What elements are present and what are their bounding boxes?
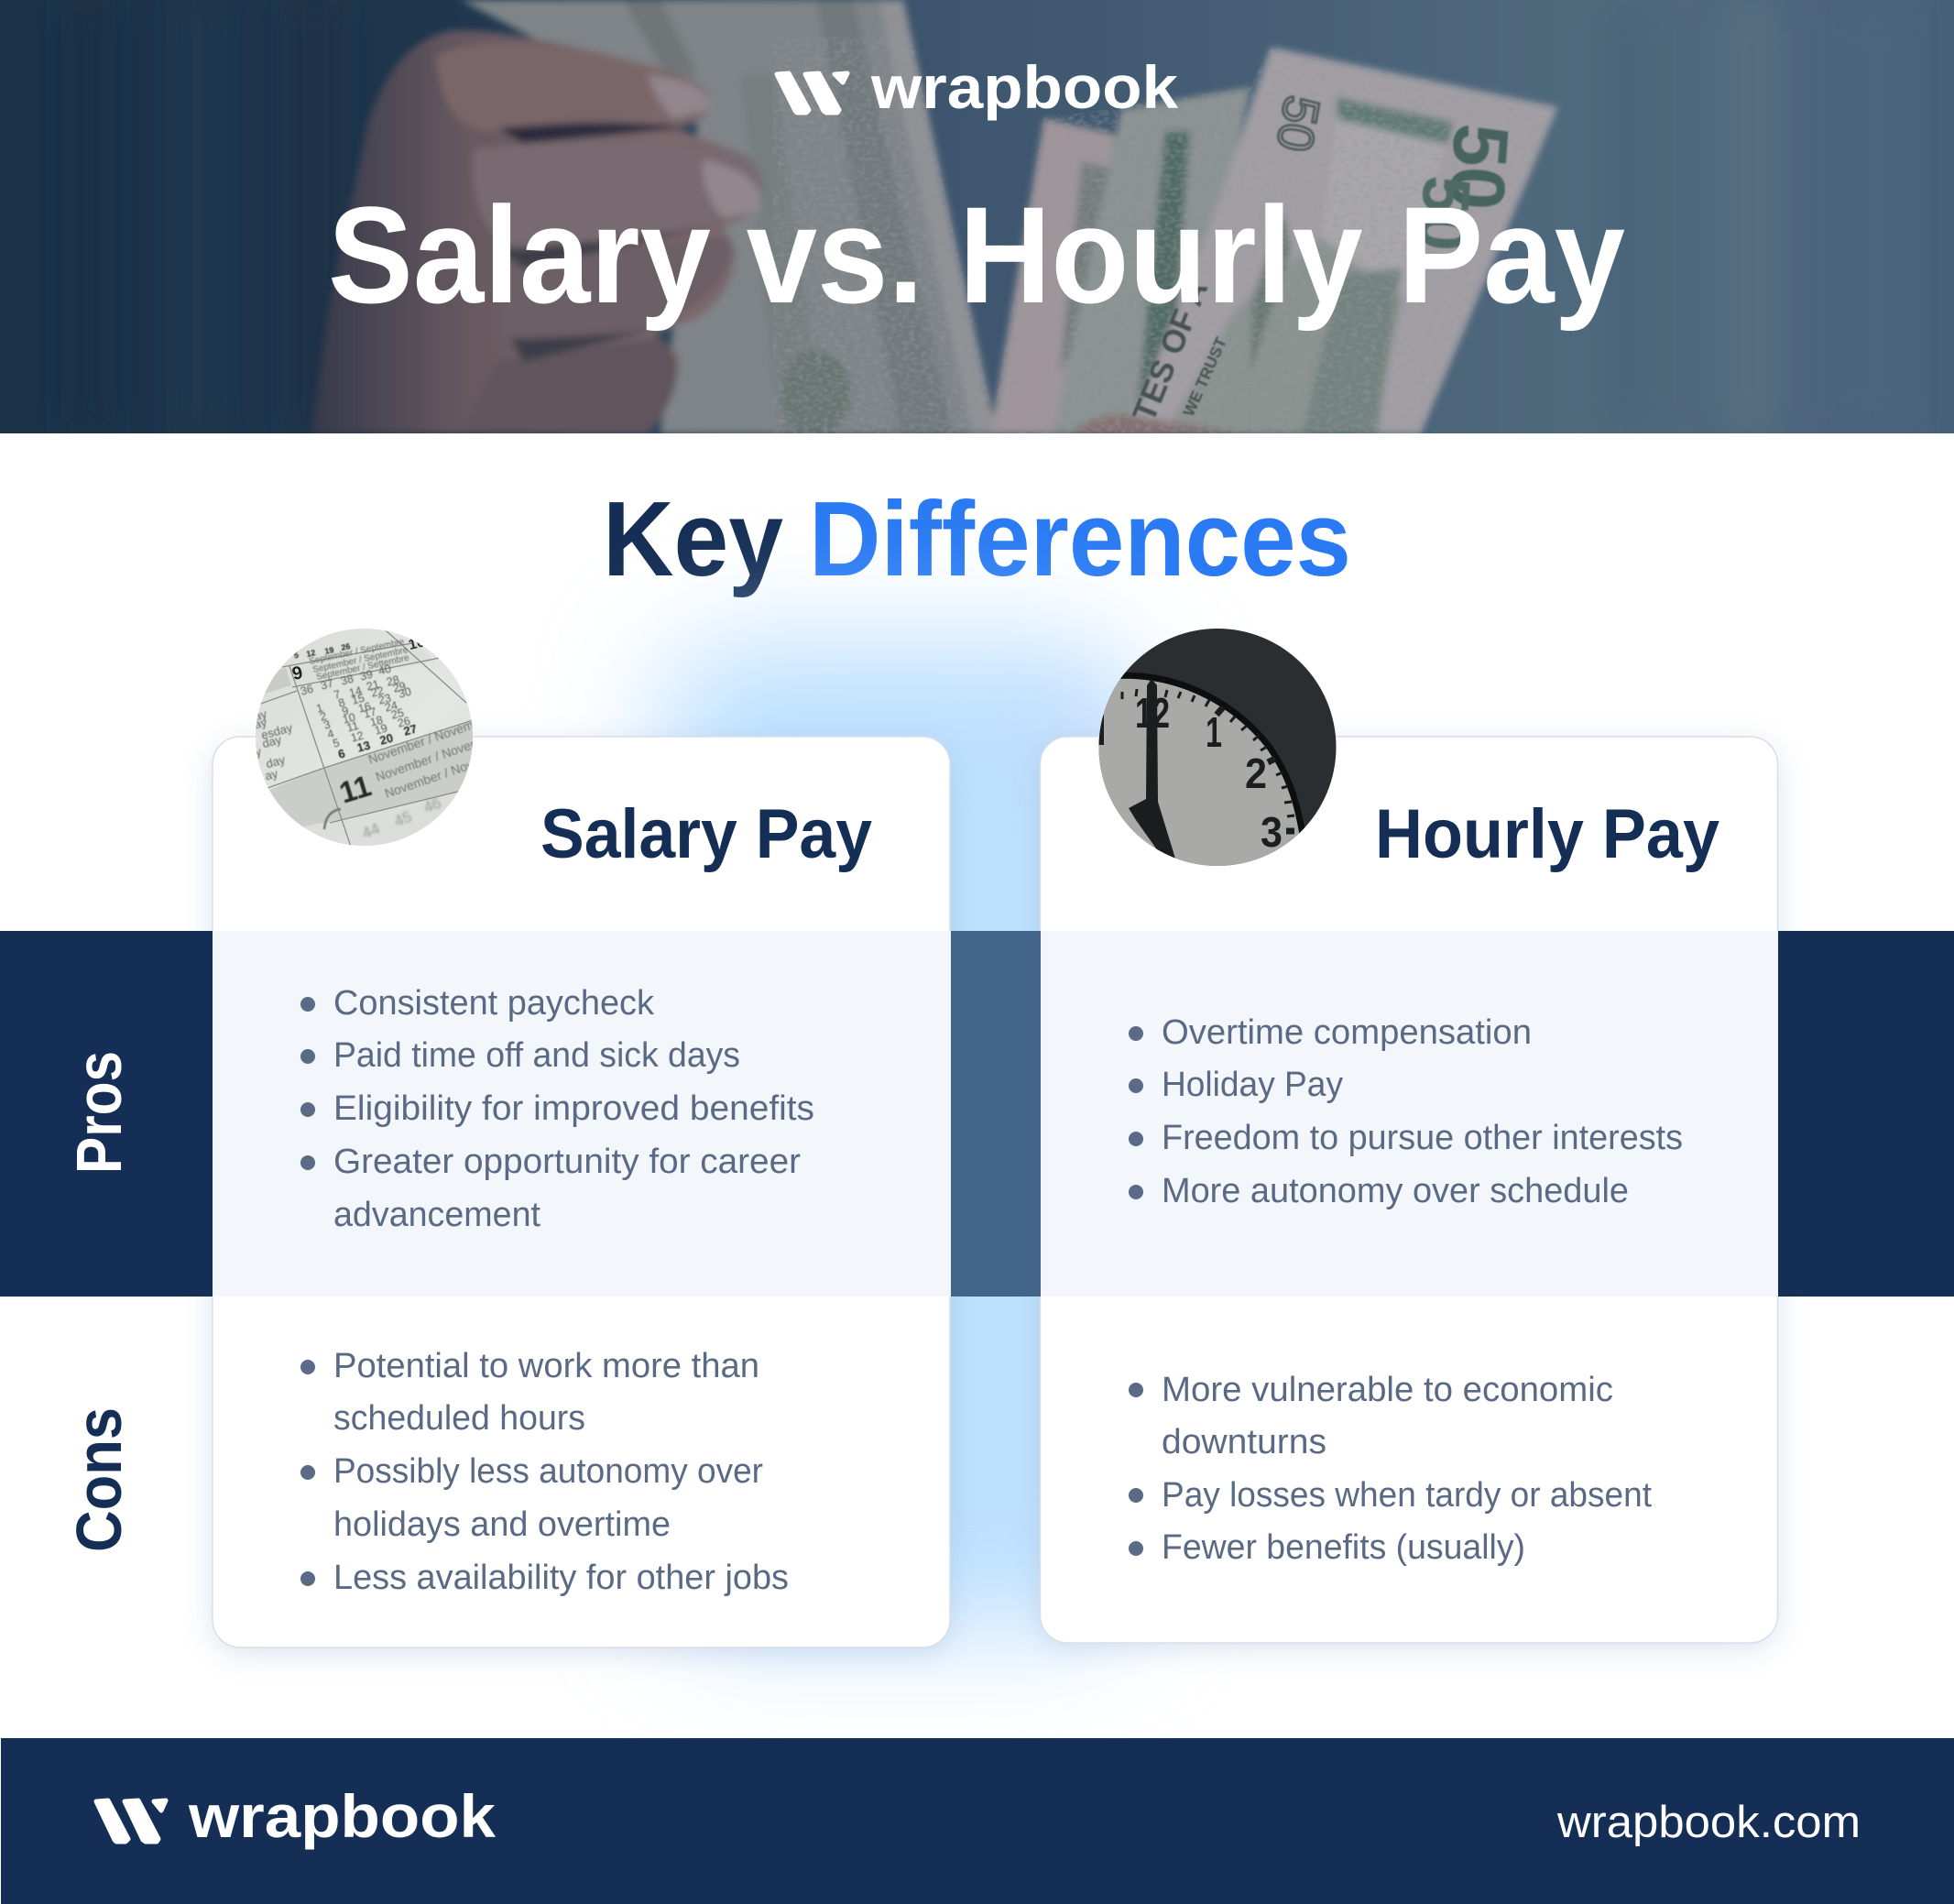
photo: calendar: 5 xyxy=(293,651,300,660)
list: Hourly cons: downturns xyxy=(1162,1423,1326,1461)
photo: calendar: 28 xyxy=(385,673,401,689)
header photo: hands holding dollar bills: WE TRUST xyxy=(1179,334,1230,419)
title: Salary vs. Hourly Pay xyxy=(328,178,1625,332)
list: Salary pros: Greater opportunity for career xyxy=(333,1143,801,1181)
photo: wall clock: 1 xyxy=(1206,708,1222,756)
photo: calendar: 7 xyxy=(333,687,342,702)
header photo: hands holding dollar bills: TES OF A xyxy=(1127,276,1215,426)
photo: calendar: 11 xyxy=(345,719,360,735)
photo: calendar: 6 xyxy=(336,746,346,761)
photo: calendar: 8 xyxy=(337,695,346,710)
photo: calendar: day xyxy=(261,732,283,750)
photo: calendar: 26 xyxy=(396,715,412,730)
photo: calendar: esday xyxy=(259,720,294,742)
heading: Salary Pay: Salary Pay xyxy=(540,795,872,873)
photo: calendar: 18 xyxy=(368,714,385,729)
photo: calendar: September / Septembre xyxy=(308,637,406,667)
list: Salary cons: scheduled hours xyxy=(333,1399,585,1438)
photo: calendar: 17 xyxy=(362,706,378,721)
footer url: wrapbook.com xyxy=(1556,1798,1861,1847)
photo: calendar: 11 xyxy=(335,769,375,810)
photo: calendar: November / November xyxy=(374,728,500,784)
heading: Hourly Pay: Hourly Pay xyxy=(1375,795,1719,873)
photo: calendar: 15 xyxy=(350,692,366,707)
photo: calendar: 5 xyxy=(332,736,341,750)
photo: calendar: 25 xyxy=(389,706,406,722)
photo: calendar: September / Septembre xyxy=(311,645,409,675)
heading: Key Differences: Differences xyxy=(809,479,1351,598)
photo: calendar: 29 xyxy=(391,680,408,695)
photo: calendar: 40 xyxy=(377,662,393,678)
list: Hourly pros: Overtime compensation xyxy=(1162,1013,1532,1052)
bill corner numerals and lettering: 50 xyxy=(1433,121,1525,213)
photo: wall clock xyxy=(1090,629,1337,870)
photo: calendar xyxy=(256,629,473,846)
photo: calendar: 44 xyxy=(360,820,382,842)
photo: calendar: 3 xyxy=(322,717,332,732)
photo: calendar: 16 xyxy=(356,700,373,716)
panel: Salary Pay card xyxy=(213,737,950,1647)
photo: calendar: 45 xyxy=(392,808,414,830)
photo: calendar: November / November xyxy=(383,745,509,801)
photo: calendar: 24 xyxy=(383,699,399,715)
photo: calendar: 39 xyxy=(358,668,375,684)
fabric folds xyxy=(1740,22,1768,407)
photo: calendar: 9 xyxy=(290,662,304,684)
photo: wall clock: 12 xyxy=(1135,689,1170,737)
list: Hourly pros: Holiday Pay xyxy=(1162,1066,1343,1104)
footer logo: wrapbook xyxy=(188,1782,496,1850)
header photo: hands holding dollar bills: 50 xyxy=(1404,173,1485,254)
list: Salary cons: Possibly less autonomy over xyxy=(333,1452,763,1491)
photo: calendar: ay xyxy=(253,706,268,723)
list: Salary pros: Paid time off and sick days xyxy=(333,1036,740,1075)
photo: calendar: 12 xyxy=(349,729,366,745)
list: Salary cons: Less availability for other jobs xyxy=(333,1559,789,1597)
photo: calendar: 12 xyxy=(305,648,316,659)
list: Hourly pros: Freedom to pursue other interests xyxy=(1162,1119,1683,1157)
photo: calendar: day xyxy=(265,752,287,771)
icon: wrapbook mark xyxy=(777,73,847,113)
photo: calendar: 26 xyxy=(340,641,351,652)
list: Hourly cons: Fewer benefits (usually) xyxy=(1162,1528,1525,1567)
photo: calendar: 4 xyxy=(326,727,335,741)
header photo: hands holding dollar bills: 50 xyxy=(1266,92,1330,156)
bill engraving texture xyxy=(773,37,1531,433)
photo: calendar: ay xyxy=(264,766,279,782)
right front bill xyxy=(1128,48,1557,433)
photo: calendar: 1 xyxy=(315,701,324,716)
pros band xyxy=(0,931,1954,1297)
photo: calendar: 19 xyxy=(373,722,389,738)
photo: calendar: 46 xyxy=(421,794,443,816)
top logo: wrapbook xyxy=(777,53,1178,121)
panel: Hourly Pay card xyxy=(1041,737,1777,1643)
wordmark: wrapbook xyxy=(870,53,1178,121)
list: Hourly pros xyxy=(1129,1013,1683,1210)
list: Salary pros: Eligibility for improved benefits xyxy=(333,1089,814,1128)
photo: calendar: 30 xyxy=(397,685,413,701)
list: Salary cons: holidays and overtime xyxy=(333,1505,671,1544)
bottom finger xyxy=(1072,414,1246,433)
photo: calendar: November / November xyxy=(366,711,493,767)
row label: Pros: Pros xyxy=(63,1051,135,1174)
left bill stack xyxy=(461,0,997,433)
photo: calendar: 10 xyxy=(407,634,427,653)
footer xyxy=(1,1738,1954,1904)
list: Hourly pros: More autonomy over schedule xyxy=(1162,1172,1629,1210)
list: Salary pros xyxy=(300,984,814,1234)
photo: calendar: y xyxy=(254,744,263,760)
photo: calendar: September / Settembre xyxy=(315,653,410,683)
photo: calendar: 22 xyxy=(369,684,386,700)
list: Hourly cons xyxy=(1129,1371,1652,1567)
photo: wall clock: 3 xyxy=(1261,808,1283,856)
list: Hourly cons: More vulnerable to economic xyxy=(1162,1371,1613,1409)
photo: calendar: ay xyxy=(253,715,268,731)
list: Hourly cons: Pay losses when tardy or absent xyxy=(1162,1476,1652,1515)
card shadows xyxy=(213,744,1777,1653)
list: Salary pros: Consistent paycheck xyxy=(333,984,655,1023)
list: Salary pros: advancement xyxy=(333,1196,540,1234)
list: Salary cons: Potential to work more than xyxy=(333,1347,759,1385)
photo: calendar: 13 xyxy=(355,739,372,755)
heading: Key Differences xyxy=(603,479,1351,598)
photo: calendar: 20 xyxy=(378,731,395,748)
photo: calendar: 14 xyxy=(347,684,364,700)
photo: calendar: 36 xyxy=(299,683,315,698)
heading: Key Differences: Key xyxy=(603,479,783,598)
photo: calendar: 27 xyxy=(402,722,419,739)
photo: calendar: 23 xyxy=(377,692,393,707)
photo: calendar: 21 xyxy=(365,678,381,694)
list: Salary cons xyxy=(300,1347,789,1597)
photo: calendar: 38 xyxy=(339,673,355,688)
photo: calendar: 37 xyxy=(319,677,335,693)
photo: calendar: 10 xyxy=(341,711,357,727)
photo: calendar: 2 xyxy=(319,709,328,724)
photo: calendar: 9 xyxy=(341,704,350,718)
right back bills xyxy=(990,118,1115,433)
hand xyxy=(311,30,763,433)
row label: Cons: Cons xyxy=(63,1407,135,1552)
background glow between cards xyxy=(660,641,1163,1631)
photo: calendar: 19 xyxy=(323,645,334,656)
photo: wall clock: 2 xyxy=(1245,750,1267,797)
header photo: hands holding dollar bills xyxy=(0,0,1954,436)
